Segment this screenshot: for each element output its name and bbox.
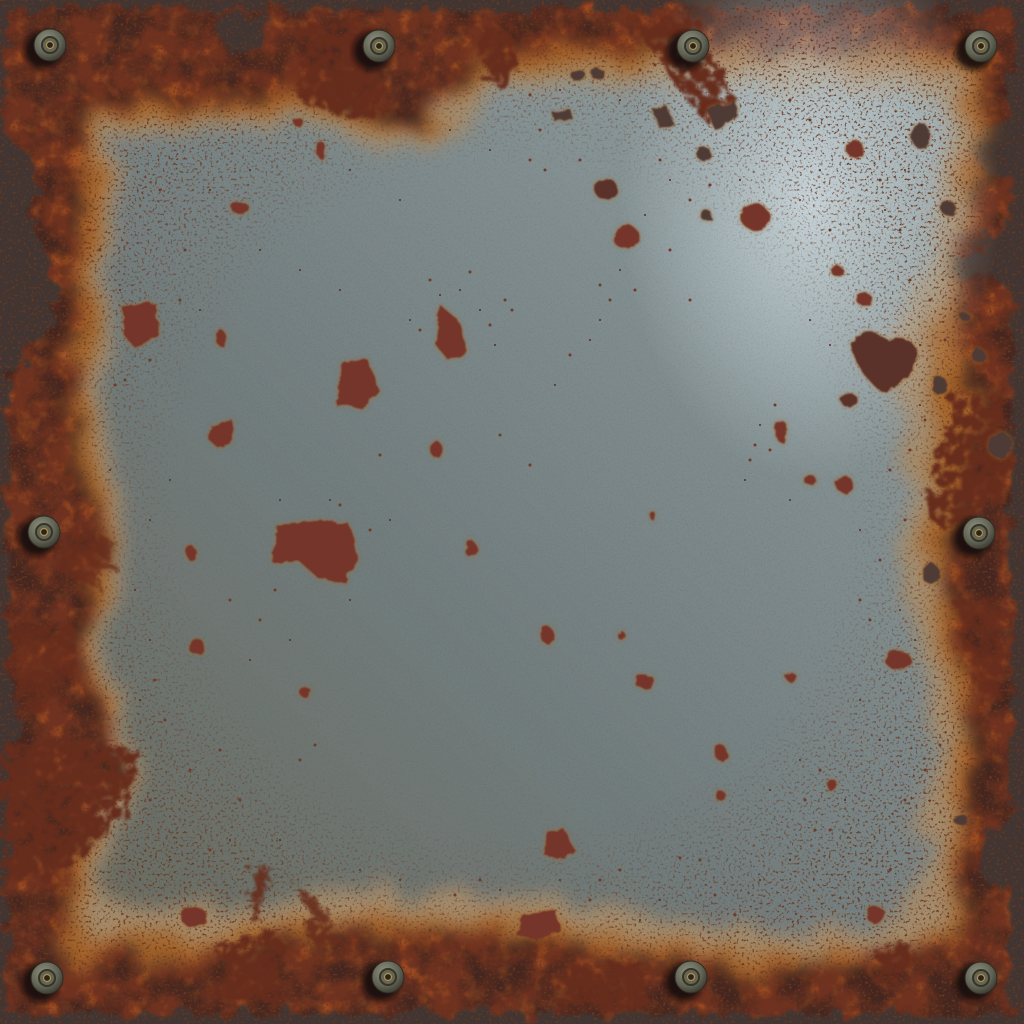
- bright steel glare: [620, 0, 1000, 480]
- bare steel area: [100, 85, 945, 935]
- bolts, middle row: [18, 516, 995, 557]
- blotch: heart-shaped: [852, 332, 917, 392]
- bolt: middle right: [953, 517, 995, 557]
- bolt: top 4: [955, 30, 997, 70]
- bolt: middle left: [18, 516, 60, 556]
- bolt: top 3: [667, 30, 709, 70]
- bolt: bottom 4: [955, 962, 997, 1002]
- blotch: cluster: [272, 520, 358, 582]
- blotch: upper left: [122, 302, 159, 348]
- bolts, top row: [24, 29, 997, 70]
- bolt: top 2: [353, 30, 395, 70]
- bolts, bottom row: [21, 961, 997, 1002]
- bolt: top 1: [24, 29, 66, 69]
- large rust blotches: [122, 118, 917, 941]
- pale rust fringe: [80, 62, 965, 960]
- scattered rust specks: [90, 60, 960, 960]
- dark rust flakes: [553, 68, 1012, 825]
- blotch: lower centre: [544, 830, 575, 860]
- blotch: left centre: [336, 360, 379, 408]
- bolt: bottom 2: [362, 961, 404, 1001]
- bolt: bottom 1: [21, 962, 63, 1002]
- blotch: centre top: [436, 305, 468, 360]
- bolt: bottom 3: [665, 961, 707, 1001]
